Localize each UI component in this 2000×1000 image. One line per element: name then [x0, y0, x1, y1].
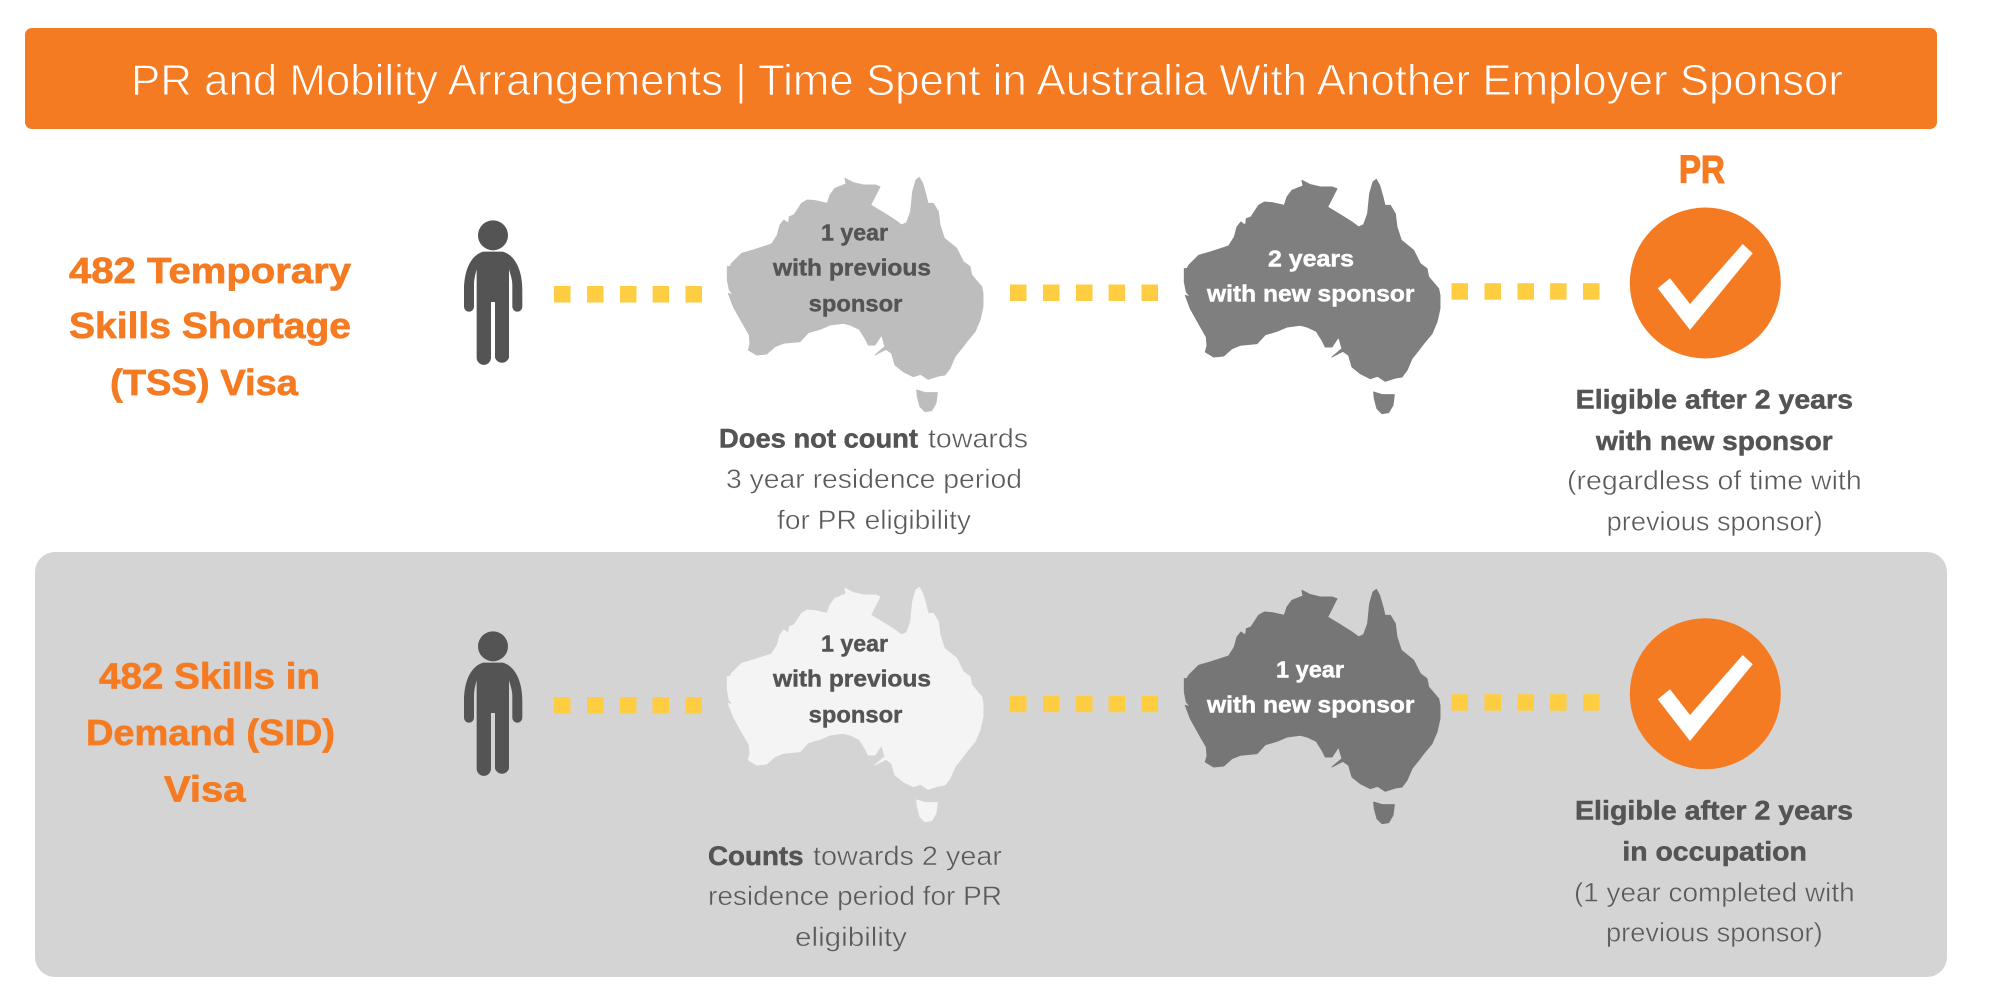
map: 1 year with previous sponsor: with previous [772, 254, 931, 280]
dotted connector 3 [1452, 694, 1600, 711]
heading: 482 Temporary Skills Shortage (TSS) Visa [69, 250, 351, 403]
heading: 482 Temporary Skills Shortage (TSS) Visa: (TSS) Visa [110, 362, 299, 403]
panel: 482 SID visa row [35, 552, 1947, 977]
heading: 482 Skills in Demand (SID) Visa: Demand (SID) [86, 712, 335, 753]
text: eligible after 2 years in occupation [1574, 795, 1855, 948]
dotted connector 1 [554, 286, 702, 302]
heading: 482 Temporary Skills Shortage (TSS) Visa: Skills Shortage [69, 305, 351, 346]
map: 1 year with previous sponsor: with previous [772, 666, 931, 692]
map: 2 years with new sponsor: with new sponsor [1206, 281, 1414, 307]
text: eligible after 2 years in occupation: Eligible after 2 years [1575, 795, 1853, 825]
map: 1 year with previous sponsor: sponsor [809, 702, 902, 728]
text: eligible after 2 years with new sponsor: previous sponsor) [1607, 507, 1823, 537]
label: PR: PR [1679, 149, 1725, 192]
icon: person [464, 220, 522, 365]
map: 1 year with new sponsor [1184, 589, 1440, 824]
icon: check circle [1630, 208, 1781, 358]
heading: 482 Temporary Skills Shortage (TSS) Visa: 482 Temporary [69, 250, 351, 291]
icon: check circle [1630, 618, 1781, 769]
icon: person [464, 631, 522, 776]
map: 1 year with new sponsor: 1 year [1276, 657, 1344, 683]
text: does not count: 3 year residence period [726, 464, 1022, 494]
text: counts towards [708, 841, 1002, 952]
dotted connector 3 [1452, 283, 1600, 300]
map: 1 year with previous sponsor [727, 587, 983, 822]
text: counts towards: residence period for PR [708, 881, 1002, 911]
map: 1 year with previous sponsor: 1 year [821, 220, 888, 246]
heading: 482 Skills in Demand (SID) Visa [86, 655, 335, 810]
map: 1 year with previous sponsor: 1 year [821, 631, 888, 657]
heading: 482 Skills in Demand (SID) Visa: Visa [164, 769, 247, 810]
text: counts towards: towards 2 year [813, 841, 1002, 871]
text: does not count: towards [928, 423, 1028, 453]
text: eligible after 2 years with new sponsor [1567, 384, 1862, 537]
text: eligible after 2 years with new sponsor: Eligible after 2 years [1576, 384, 1853, 414]
heading: 482 Skills in Demand (SID) Visa: 482 Skills in [99, 655, 320, 696]
title: PR and Mobility Arrangements | Time Spent in Australia With Another Employer Sponsor [131, 56, 1843, 105]
text: does not count: Does not count [719, 423, 918, 453]
text: eligible after 2 years with new sponsor: (regardless of time with [1567, 465, 1862, 495]
map: 1 year with previous sponsor [727, 177, 983, 412]
text: eligible after 2 years in occupation: previous sponsor) [1606, 918, 1823, 948]
text: counts towards: Counts [708, 841, 804, 871]
map: 2 years with new sponsor: 2 years [1268, 246, 1354, 272]
panel: 482 TSS visa row [69, 149, 1862, 537]
text: eligible after 2 years with new sponsor: with new sponsor [1595, 426, 1833, 456]
map: 1 year with previous sponsor: sponsor [809, 291, 902, 317]
text: eligible after 2 years in occupation: (1 year completed with [1574, 878, 1855, 908]
text: counts towards: eligibility [795, 922, 908, 952]
title banner [25, 28, 1937, 129]
dotted connector 2 [1010, 696, 1158, 712]
dotted connector 1 [554, 697, 702, 714]
text: does not count: for PR eligibility [777, 505, 972, 535]
map: 1 year with new sponsor: with new sponsor [1206, 692, 1414, 718]
dotted connector 2 [1010, 284, 1158, 301]
text: does not count [719, 423, 1028, 535]
map: 2 years with new sponsor [1184, 179, 1440, 414]
text: eligible after 2 years in occupation: in occupation [1622, 837, 1807, 867]
